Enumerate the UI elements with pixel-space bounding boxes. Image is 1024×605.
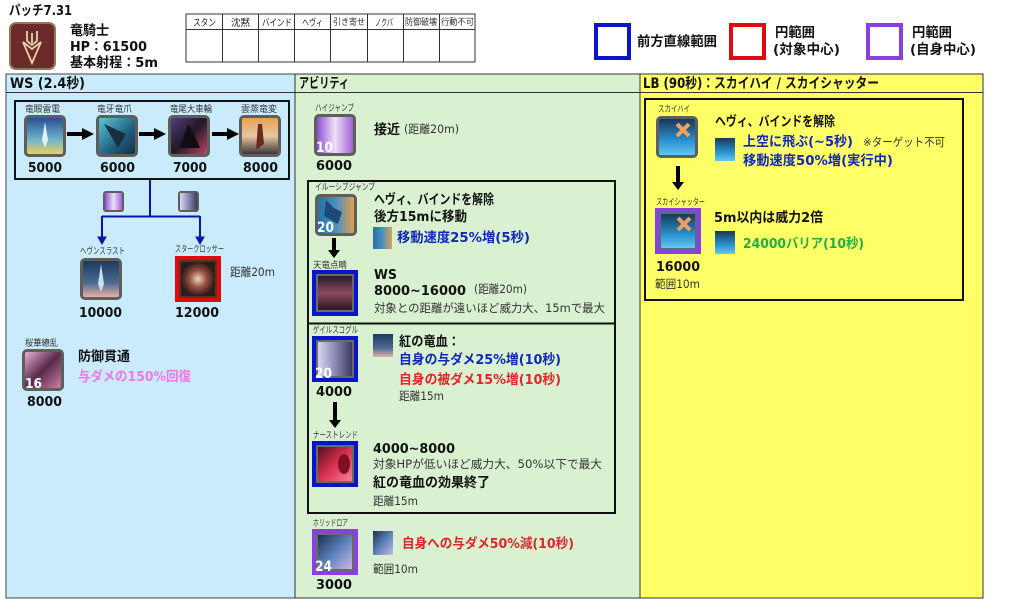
skill: スカイシャッター: [655, 197, 705, 291]
skill: 竜眼雷電: 竜眼雷電: [25, 103, 60, 115]
text: life of the dragon: 紅の竜血：: [399, 333, 460, 350]
legend: self circle: [868, 24, 976, 58]
skill: 竜牙竜爪: 竜牙竜爪: [97, 103, 132, 115]
heading: LB: LB (90秒)：スカイハイ / スカイシャッター: [643, 76, 879, 92]
legend: target circle: 円範囲: [775, 24, 815, 41]
icon: geirskogul requirement: [178, 191, 199, 212]
skill: 竜牙竜爪: 6000: [100, 161, 135, 176]
combo box: elusive jump: [308, 181, 615, 513]
arrow: [139, 128, 166, 140]
text: elusive jump effects: 移動速度25%増(5秒): [397, 229, 530, 246]
skill: 竜尾大車輪: 7000: [173, 161, 207, 176]
crowd control table: 行動不可: [441, 16, 474, 28]
skill: 桜華繚乱: 桜華繚乱: [25, 337, 58, 349]
crowd control table: 引き寄せ: [333, 16, 365, 28]
skill: 天竜点睛: [312, 259, 358, 316]
arrow: [329, 402, 341, 428]
skill: ハイジャンプ: 10: [316, 140, 333, 156]
skill: ゲイルスコグル: [312, 324, 358, 400]
skill: 桜華繚乱: [22, 337, 64, 410]
arrow: [212, 128, 239, 140]
skill: ゲイルスコグル: 20: [315, 366, 332, 382]
skill: ゲイルスコグル: ゲイルスコグル: [313, 324, 358, 336]
legend: line range: 前方直線範囲: [637, 33, 717, 50]
panel: ability: [295, 74, 640, 598]
text: drakesbane effects: (距離20m): [474, 282, 527, 296]
text: elusive jump effects: [373, 191, 530, 249]
skill: スカイシャッター: スカイシャッター: [656, 197, 705, 208]
job stats: 竜騎士: [70, 22, 109, 39]
text: sky high effects: ※ターゲット不可: [863, 135, 945, 149]
skill: スタークロッサー: [175, 244, 224, 321]
text: nastrond effects: 4000~8000: [373, 441, 455, 457]
icon: high jump requirement: [103, 191, 124, 212]
text: nastrond effects: [373, 441, 602, 508]
arrow: [328, 238, 340, 258]
text: elusive jump effects: ヘヴィ、バインドを解除: [374, 191, 494, 208]
text: elusive jump effects: 後方15mに移動: [374, 208, 467, 225]
text: horrid roar effects: 自身への与ダメ50%減(10秒): [402, 535, 574, 552]
text: drakesbane effects: 対象との距離が遠いほど威力大、15mで最大: [374, 301, 605, 315]
legend: self circle: (自身中心): [910, 41, 976, 58]
skill: スタークロッサー: 12000: [175, 306, 219, 321]
crowd control table: スタン: [193, 18, 216, 29]
text: sky shatter effects: 5m以内は威力2倍: [714, 209, 823, 226]
text: sky high effects: 上空に飛ぶ(~5秒): [743, 134, 853, 150]
skill: スカイシャッター: 範囲10m: [655, 277, 700, 291]
heading: WS: WS (2.4秒): [10, 76, 85, 92]
heading: ability: アビリティ: [299, 75, 349, 92]
skill: ヘヴンスラスト: 10000: [79, 306, 122, 321]
skill: ホリッドロア: 24: [315, 559, 332, 575]
skill: スカイハイ: スカイハイ: [658, 104, 690, 115]
arrow: [67, 128, 94, 140]
patch label: パッチ7.31: [9, 3, 72, 19]
crowd control table: ヘヴィ: [302, 17, 323, 29]
skill: スカイシャッター: 16000: [656, 260, 700, 275]
skill: 天竜点睛: 天竜点睛: [313, 259, 347, 271]
skill: 雲蒸竜変: 8000: [243, 161, 278, 176]
skill: 竜尾大車輪: [168, 103, 212, 176]
text: sky shatter effects: [714, 209, 864, 254]
skill: ゲイルスコグル: 4000: [316, 385, 352, 400]
text: horrid roar effects: [373, 531, 574, 576]
text: penetration: [78, 348, 191, 385]
crowd control table: ノクバ: [375, 18, 393, 29]
skill: ナーストレンド: [312, 430, 358, 487]
combo box: sky high: [645, 99, 963, 300]
text: sky shatter effects: 24000バリア(10秒): [743, 236, 864, 252]
skill: イルーシブジャンプ: [315, 181, 375, 236]
skill: スカイハイ: [656, 104, 698, 158]
skill: ホリッドロア: ホリッドロア: [313, 518, 348, 529]
skill: ホリッドロア: [312, 518, 358, 593]
arrow: [672, 166, 684, 190]
text: life of the dragon: [373, 333, 561, 403]
text: penetration: 与ダメの150%回復: [78, 368, 191, 385]
job stats: 基本射程：5m: [70, 54, 158, 71]
text: sky high effects: [715, 113, 945, 169]
panel: limit break: [640, 74, 983, 598]
crowd control table: バインド: [262, 18, 292, 29]
text: approach: 接近: [374, 121, 400, 138]
skill: ハイジャンプ: 6000: [316, 159, 352, 174]
skill: イルーシブジャンプ: イルーシブジャンプ: [315, 181, 375, 193]
legend: self circle: 円範囲: [912, 24, 952, 41]
skill: スタークロッサー: スタークロッサー: [175, 244, 224, 255]
skill: ナーストレンド: ナーストレンド: [313, 430, 358, 441]
skill: ハイジャンプ: ハイジャンプ: [315, 103, 354, 114]
skill: 竜牙竜爪: [96, 103, 138, 176]
text: life of the dragon: 距離15m: [399, 389, 444, 403]
skill: ヘヴンスラスト: ヘヴンスラスト: [80, 245, 125, 257]
legend: target circle: [731, 24, 840, 58]
skill: 雲蒸竜変: [239, 103, 281, 176]
panel: WS: [6, 74, 295, 598]
legend: target circle: (対象中心): [773, 41, 840, 58]
icon: dragoon job: [9, 22, 56, 70]
crowd control table: 防御破壊: [405, 16, 437, 28]
skill: ハイジャンプ: [314, 103, 356, 174]
range note: 距離20m: [230, 265, 275, 279]
skill: 竜尾大車輪: 竜尾大車輪: [170, 103, 212, 115]
combo box: [15, 101, 289, 179]
text: nastrond effects: 対象HPが低いほど威力大、50%以下で最大: [373, 457, 602, 471]
skill: ヘヴンスラスト: [79, 245, 125, 321]
branch arrows: [98, 180, 204, 244]
job stats: HP：61500: [70, 39, 147, 55]
text: nastrond effects: 紅の竜血の効果終了: [373, 474, 490, 491]
text: drakesbane effects: 8000~16000: [374, 283, 466, 299]
text: life of the dragon: 自身の与ダメ25%増(10秒): [399, 351, 561, 368]
skill: 竜眼雷電: [24, 103, 66, 176]
job stats: [70, 22, 158, 71]
text: nastrond effects: 距離15m: [373, 494, 418, 508]
text: sky high effects: 移動速度50%増(実行中): [743, 152, 893, 169]
text: sky high effects: ヘヴィ、バインドを解除: [715, 113, 835, 130]
skill: 竜眼雷電: 5000: [28, 161, 62, 176]
skill: 桜華繚乱: 16: [25, 377, 42, 392]
skill: ホリッドロア: 3000: [316, 578, 352, 593]
text: drakesbane effects: WS: [374, 267, 397, 283]
crowd control table: [186, 14, 475, 62]
text: penetration: 防御貫通: [78, 348, 130, 365]
crowd control table: 沈黙: [231, 17, 250, 29]
text: life of the dragon: 自身の被ダメ15%増(10秒): [399, 371, 561, 388]
skill: 雲蒸竜変: 雲蒸竜変: [241, 103, 277, 115]
text: approach: [374, 121, 459, 138]
skill: 桜華繚乱: 8000: [27, 395, 62, 410]
skill: イルーシブジャンプ: 20: [317, 220, 334, 236]
legend: line range: [596, 25, 717, 58]
text: approach: (距離20m): [404, 122, 459, 136]
text: drakesbane effects: [374, 267, 605, 315]
text: horrid roar effects: 範囲10m: [373, 562, 418, 576]
